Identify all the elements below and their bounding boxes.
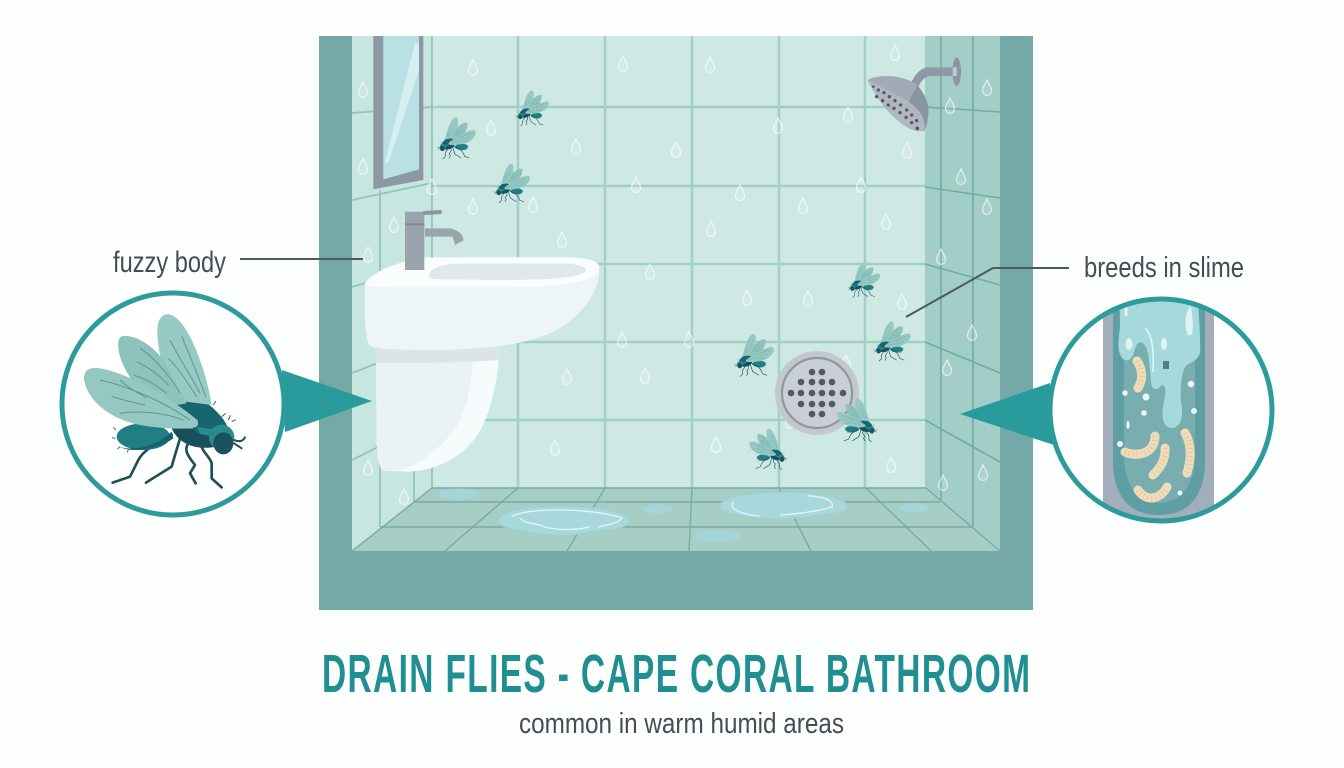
callout: slime and larvae close-up bbox=[960, 295, 1272, 530]
bathroom outer frame bbox=[319, 36, 1033, 610]
sink basin bbox=[365, 257, 599, 350]
sink pedestal bbox=[375, 348, 499, 472]
pipe walls bbox=[1103, 310, 1214, 518]
leader line: breeds in slime bbox=[906, 268, 1069, 317]
mirror bbox=[373, 36, 423, 189]
leader line: fuzzy body bbox=[240, 258, 363, 260]
shower head bbox=[867, 57, 961, 132]
left side wall bbox=[352, 36, 432, 551]
water droplets on walls bbox=[358, 44, 992, 504]
panel: bathroom scene bbox=[319, 36, 1033, 610]
larvae bbox=[1125, 361, 1190, 498]
subtitle: common in warm humid areas bbox=[519, 708, 844, 740]
callout: fly close-up bbox=[62, 293, 372, 515]
back wall tiles bbox=[432, 36, 926, 488]
magnified circle left bbox=[62, 293, 284, 515]
small flies bbox=[437, 90, 911, 470]
tiled floor bbox=[352, 488, 1000, 551]
sink and pedestal bbox=[365, 210, 599, 472]
drain pipe with slime and larvae bbox=[1103, 295, 1214, 530]
air bubbles bbox=[1117, 381, 1197, 496]
label: breeds in slime: breeds in slime bbox=[1084, 252, 1244, 284]
callout pointer left bbox=[282, 370, 372, 432]
callout pointer right bbox=[960, 383, 1054, 445]
right side wall bbox=[925, 36, 1000, 551]
dripping slime bbox=[1118, 295, 1200, 428]
label: fuzzy body: fuzzy body bbox=[113, 246, 226, 279]
magnified circle ring right bbox=[1050, 299, 1272, 521]
title: DRAIN FLIES - CAPE CORAL BATHROOM bbox=[322, 643, 1030, 704]
floor puddles bbox=[439, 488, 929, 542]
magnified circle right bbox=[1050, 299, 1272, 521]
icon: large drain fly bbox=[84, 314, 245, 487]
faucet bbox=[405, 210, 463, 270]
floor drain bbox=[775, 351, 859, 435]
